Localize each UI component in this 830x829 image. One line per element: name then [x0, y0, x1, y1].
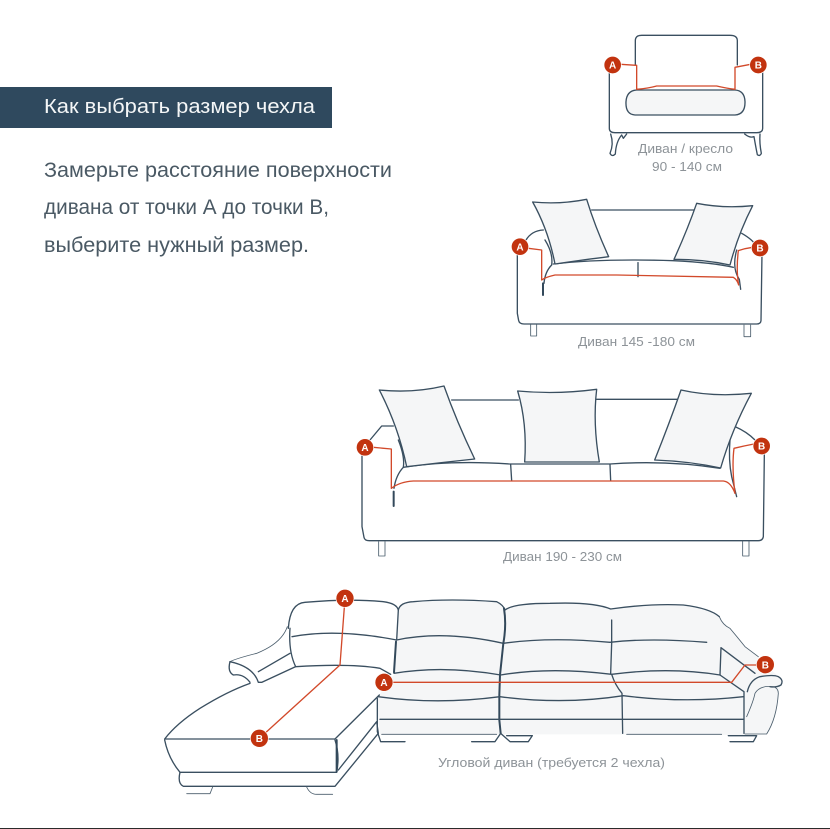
text block: instructions: дивана от точки А до точки В,: [44, 196, 329, 219]
measure line: main: [384, 665, 765, 682]
text block: instructions: [44, 159, 392, 257]
heading: title banner: [0, 87, 332, 128]
pillow left: [379, 386, 475, 467]
caption: three-seat sofa: Диван 190 - 230 см: [503, 549, 622, 564]
marker A top: A: [341, 594, 349, 605]
illustration: corner sofa: [165, 589, 782, 794]
chaise seat: [165, 683, 379, 739]
marker A main: A: [380, 678, 388, 689]
illustration: three-seat sofa: [356, 386, 770, 556]
marker B chaise: B: [256, 734, 263, 745]
measure line: [621, 64, 751, 89]
measure line: [373, 444, 754, 493]
marker A: [511, 238, 529, 255]
marker A: [604, 56, 621, 74]
chaise back: [288, 600, 398, 640]
caption: corner sofa: Угловой диван (требуется 2 чехла): [438, 755, 665, 770]
marker A: A: [516, 242, 524, 253]
illustration: armchair: [604, 35, 767, 156]
marker A: A: [609, 61, 616, 72]
pillow left: [533, 199, 609, 264]
caption: armchair: 90 - 140 см: [652, 159, 722, 174]
marker B main: [756, 656, 774, 674]
marker B: [751, 239, 769, 257]
marker A main: [375, 673, 393, 691]
sofa body fill: [377, 600, 782, 735]
marker A: [356, 439, 374, 456]
marker A top: [336, 589, 354, 607]
marker B: [750, 56, 767, 74]
heading: title banner: Как выбрать размер чехла: [44, 96, 316, 118]
right arm: [720, 648, 755, 675]
marker A: A: [361, 443, 369, 454]
marker B chaise: [250, 729, 268, 747]
text block: instructions: Замерьте расстояние поверхности: [44, 159, 392, 182]
pillow centre: [518, 389, 599, 462]
pillow right: [674, 203, 753, 265]
pillow right: [655, 390, 751, 468]
seat cushion: [626, 90, 745, 115]
marker B: [753, 437, 770, 455]
marker B: B: [755, 61, 762, 72]
marker B: B: [756, 244, 764, 255]
measure line: chaise: [259, 598, 345, 738]
illustration: two-seat sofa: [511, 199, 769, 337]
main sofa outline: [398, 600, 719, 617]
caption: two-seat sofa: Диван 145 -180 см: [578, 334, 695, 349]
caption: armchair: [638, 141, 733, 174]
measure line: [528, 247, 753, 285]
caption: armchair: Диван / кресло: [638, 141, 733, 156]
marker B: B: [758, 442, 765, 453]
text block: instructions: выберите нужный размер.: [44, 234, 309, 257]
marker B main: B: [762, 660, 769, 671]
